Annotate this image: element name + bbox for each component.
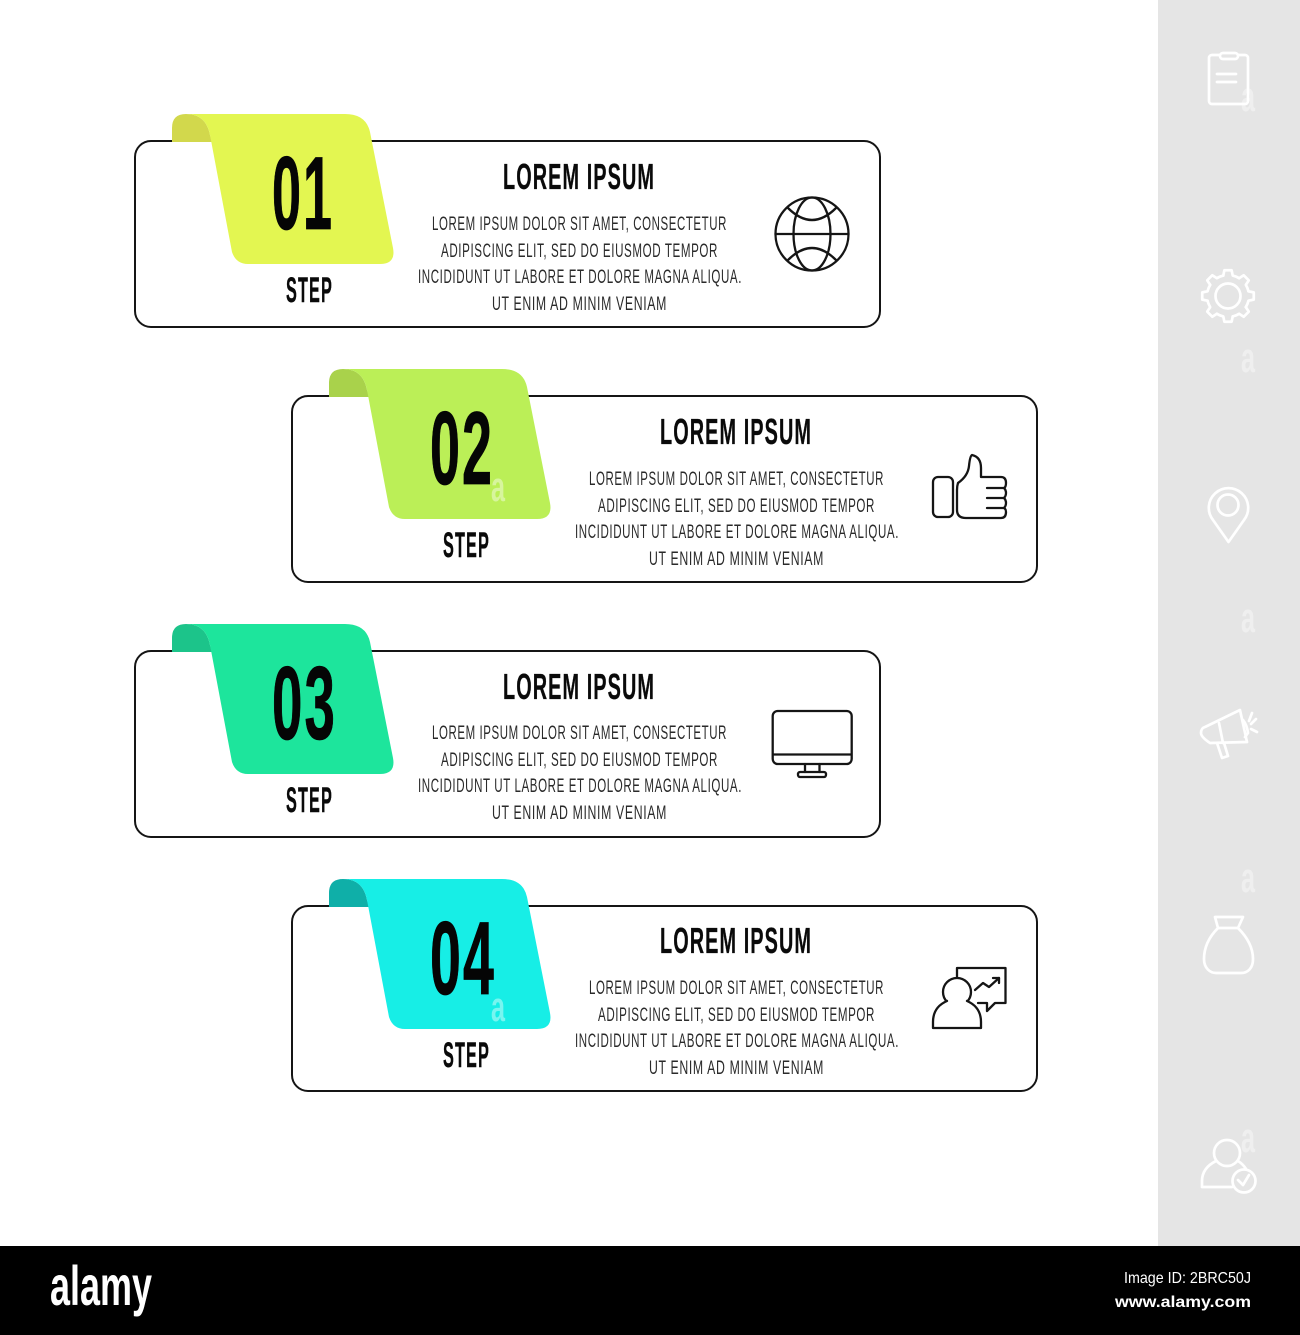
body text: UT ENIM AD MINIM VENIAM <box>649 549 824 570</box>
ribbon fold <box>329 879 369 907</box>
watermark marks: a <box>1241 334 1255 381</box>
ribbon tab <box>186 114 393 264</box>
icon: globe <box>776 198 848 270</box>
card: step 02 <box>292 369 1037 582</box>
watermark marks: a <box>1241 73 1255 120</box>
card: step 03: STEP <box>286 780 333 820</box>
card: step 04 <box>292 879 1037 1091</box>
body text: ADIPISCING ELIT, SED DO EIUSMOD TEMPOR <box>441 750 718 771</box>
heading: LOREM IPSUM <box>503 156 655 197</box>
watermark marks <box>491 73 1255 1161</box>
body text: INCIDIDUNT UT LABORE ET DOLORE MAGNA ALIQUA. <box>418 267 742 288</box>
image id: Image ID: 2BRC50J <box>1124 1270 1251 1287</box>
card: step 01 <box>135 114 880 327</box>
heading: LOREM IPSUM <box>660 920 812 961</box>
icon: presenter with chart <box>933 968 1006 1028</box>
card: step 02: STEP <box>443 525 490 565</box>
ribbon tab <box>343 369 550 519</box>
card: step 03 <box>135 624 880 837</box>
heading: LOREM IPSUM <box>503 666 655 707</box>
icon: monitor <box>773 711 852 777</box>
body text: ADIPISCING ELIT, SED DO EIUSMOD TEMPOR <box>598 1005 875 1026</box>
body text: INCIDIDUNT UT LABORE ET DOLORE MAGNA ALIQUA. <box>575 522 899 543</box>
body text: INCIDIDUNT UT LABORE ET DOLORE MAGNA ALIQUA. <box>418 776 742 797</box>
body text <box>575 469 899 570</box>
body text: LOREM IPSUM DOLOR SIT AMET, CONSECTETUR <box>432 214 727 235</box>
body text: UT ENIM AD MINIM VENIAM <box>492 294 667 315</box>
body text: LOREM IPSUM DOLOR SIT AMET, CONSECTETUR <box>432 723 727 744</box>
watermark marks: a <box>1241 854 1255 901</box>
footer logo: alamy <box>50 1254 152 1317</box>
ribbon tab <box>186 624 393 774</box>
body text: LOREM IPSUM DOLOR SIT AMET, CONSECTETUR <box>589 978 884 999</box>
ribbon fold <box>329 369 369 397</box>
icon: gear <box>1202 270 1254 322</box>
icon: clipboard <box>1209 53 1248 104</box>
watermark marks: a <box>491 983 505 1030</box>
ribbon tab <box>343 879 550 1029</box>
body text: ADIPISCING ELIT, SED DO EIUSMOD TEMPOR <box>441 241 718 262</box>
icon: map pin <box>1209 488 1248 542</box>
body text: ADIPISCING ELIT, SED DO EIUSMOD TEMPOR <box>598 496 875 517</box>
footer bar <box>0 1246 1300 1335</box>
body text: LOREM IPSUM DOLOR SIT AMET, CONSECTETUR <box>589 469 884 490</box>
icon: thumbs up <box>933 455 1006 518</box>
heading: LOREM IPSUM <box>660 411 812 452</box>
watermark marks: a <box>491 463 505 510</box>
step number: 02 <box>430 391 494 507</box>
card: step 01: STEP <box>286 270 333 310</box>
watermark marks: a <box>1241 1114 1255 1161</box>
step number: 03 <box>272 646 337 762</box>
watermark marks: a <box>1241 594 1255 641</box>
body text: INCIDIDUNT UT LABORE ET DOLORE MAGNA ALIQUA. <box>575 1031 899 1052</box>
panel: icon sidebar <box>1158 0 1300 1246</box>
icon: megaphone <box>1201 710 1257 758</box>
body text <box>575 978 899 1079</box>
body text: UT ENIM AD MINIM VENIAM <box>649 1058 824 1079</box>
body text <box>418 723 742 824</box>
step number: 04 <box>430 901 496 1017</box>
body text: UT ENIM AD MINIM VENIAM <box>492 803 667 824</box>
step number: 01 <box>272 136 334 252</box>
website: www.alamy.com <box>1114 1294 1251 1311</box>
body text <box>418 214 742 315</box>
icon: money bag <box>1204 917 1253 973</box>
icon: user with check <box>1202 1140 1256 1192</box>
ribbon fold <box>172 114 212 142</box>
card: step 04: STEP <box>443 1035 490 1075</box>
ribbon fold <box>172 624 212 652</box>
